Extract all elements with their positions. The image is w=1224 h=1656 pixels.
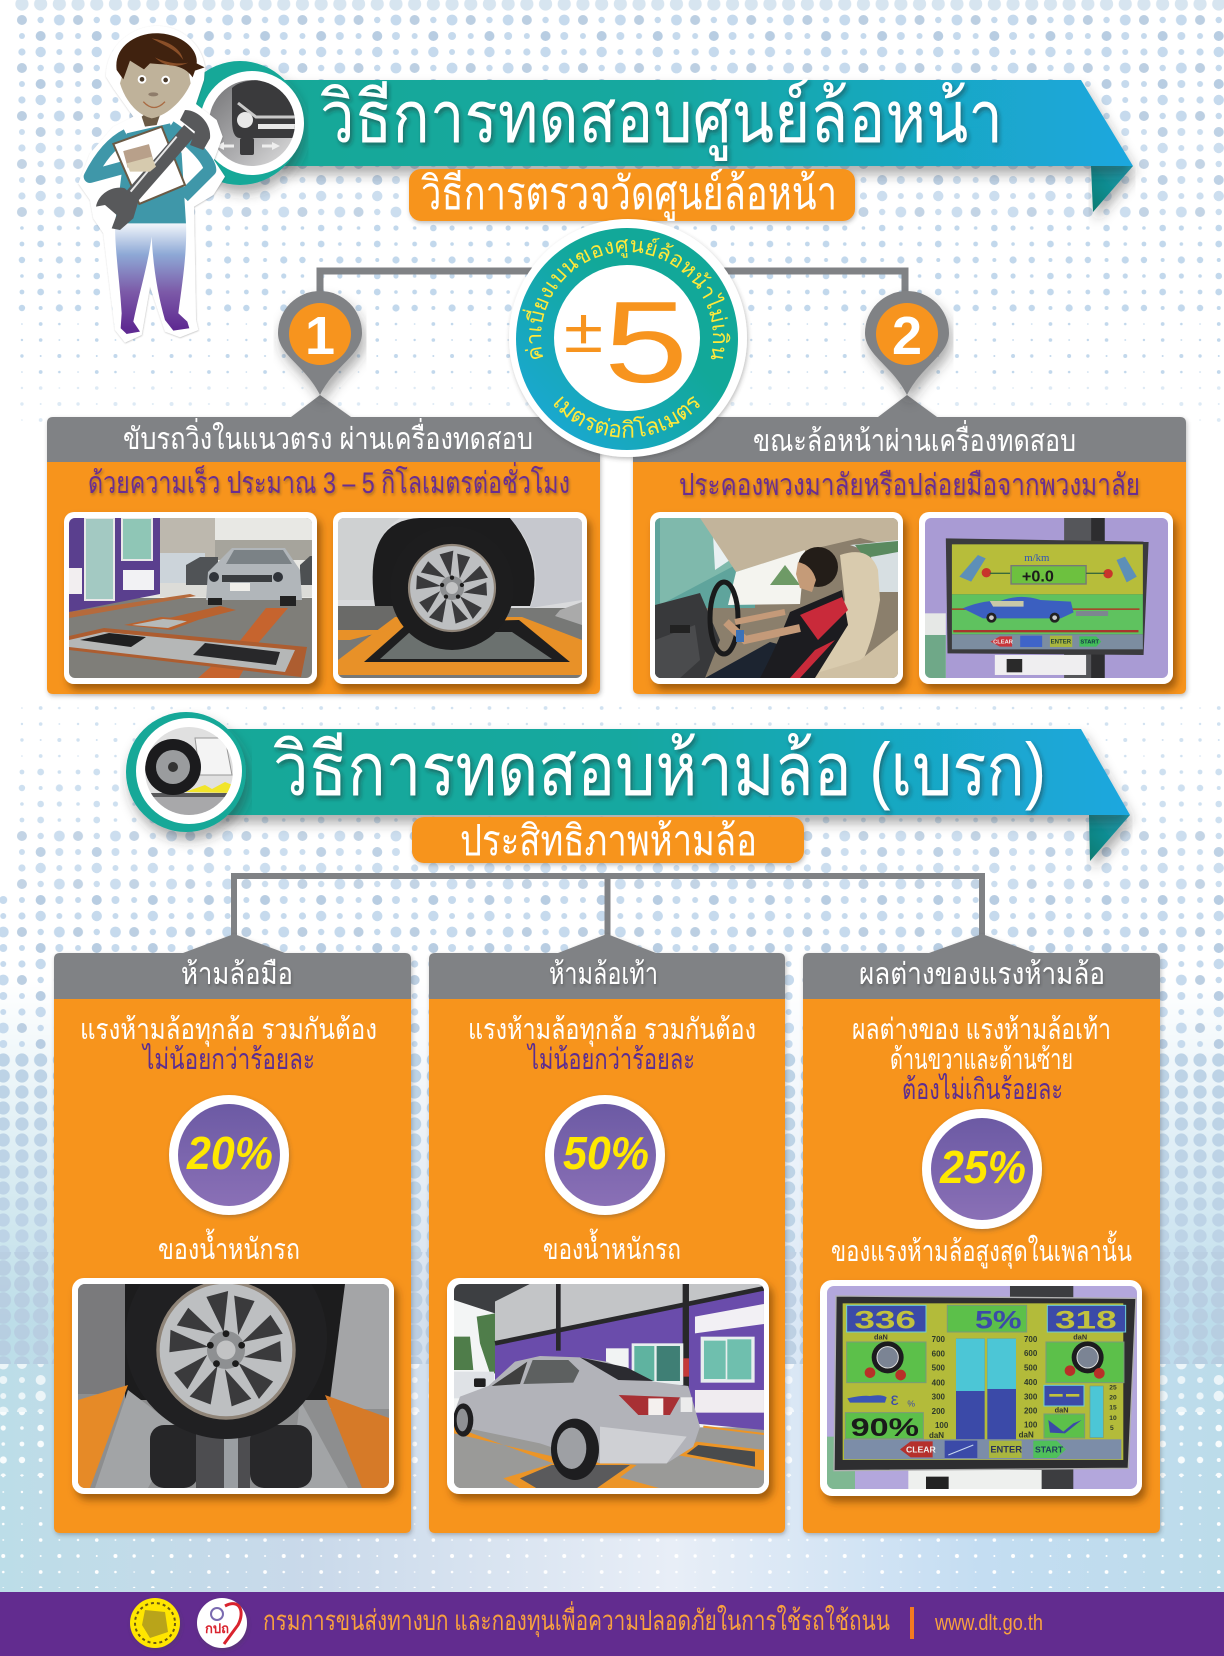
- photo: car rear on brake tester: [447, 1278, 769, 1494]
- photo: wheel on brake rollers: [72, 1237, 394, 1494]
- text: difference requirement: ผลต่างของ แรงห้ามล้อเท้า: [852, 1014, 1111, 1046]
- photo: brake tester monitor: 318: [1055, 1308, 1117, 1335]
- photo: brake tester monitor: 400: [932, 1378, 946, 1387]
- paper detail: [123, 144, 153, 168]
- hair highlights: [152, 38, 188, 66]
- photo: brake tester monitor: daN: [1019, 1430, 1034, 1439]
- photo: brake tester monitor: 15: [1109, 1404, 1117, 1411]
- pin: step 1: 1: [305, 306, 335, 366]
- subheading pill: alignment measurement: วิธีการตรวจวัดศูนย์ล้อหน้า: [421, 167, 837, 221]
- badge: 50%: [545, 1095, 665, 1215]
- logo: road safety fund: [197, 1598, 247, 1648]
- photo: brake tester monitor: daN: [1073, 1332, 1087, 1341]
- text: foot brake requirement: [468, 1014, 756, 1076]
- photo: brake tester monitor: 500: [932, 1364, 946, 1373]
- photo: brake tester monitor: 700: [1024, 1335, 1038, 1344]
- hair: [116, 33, 205, 79]
- panel header: straight-line driving: [47, 395, 600, 462]
- title: วิธีการทดสอบศูนย์ล้อหน้า: [320, 78, 1003, 161]
- panel body: straight-line driving: [47, 462, 600, 694]
- pin: step 2: [865, 291, 949, 395]
- photo: toe test monitor: [919, 512, 1173, 684]
- footer organisation text: กรมการขนส่งทางบก และกองทุนเพื่อความปลอดภัยในการใช้รถใช้ถนน: [263, 1601, 890, 1638]
- character: technician with wrench: [78, 26, 225, 343]
- badge: 25%: 25%: [939, 1141, 1026, 1193]
- photo: brake tester monitor: 10: [1109, 1415, 1117, 1422]
- connector lines: brake section: [234, 876, 982, 936]
- text: hand brake requirement: แรงห้ามล้อทุกล้อ รวมกันต้อง: [80, 1014, 377, 1047]
- photo: toe test monitor: START: [1080, 639, 1100, 645]
- badge: 20%: 20%: [186, 1127, 273, 1179]
- panel: foot brake: [429, 934, 785, 1533]
- ribbon body: [215, 729, 1130, 815]
- photo: brake tester monitor: 200: [1024, 1406, 1038, 1415]
- panel header: brake force difference: [803, 953, 1160, 999]
- photo: brake tester monitor: 25: [1109, 1384, 1117, 1391]
- text: difference requirement: ต้องไม่เกินร้อยละ: [902, 1072, 1063, 1106]
- photo: car approaching test plates: [64, 512, 317, 684]
- mouth: [143, 102, 165, 107]
- neck: [142, 110, 160, 127]
- photo: brake tester monitor: 300: [1024, 1392, 1038, 1401]
- photo: brake tester monitor: 336: [854, 1308, 916, 1335]
- footer bar: [0, 1592, 1224, 1656]
- photo: brake tester monitor: 100: [1024, 1420, 1038, 1429]
- banner: brake test: [215, 728, 1130, 861]
- connector lines: front wheel section: [320, 271, 905, 292]
- nose: [148, 92, 158, 96]
- photo: front wheel on test plate: [333, 512, 587, 684]
- photo: driver holding steering wheel: [650, 512, 903, 684]
- tolerance badge: ±5 metres per kilometre: เมตรต่อกิโลเมตร: [554, 396, 700, 438]
- caption: of max axle brake force: ของแรงห้ามล้อสูงสุดในเพลานั้น: [831, 1230, 1132, 1269]
- panel header: straight-line driving: ขับรถวิ่งในแนวตรง ผ่านเครื่องทดสอบ: [123, 418, 533, 456]
- photo: brake tester monitor: ε: [891, 1389, 899, 1409]
- photo: brake tester monitor: CLEAR: [906, 1445, 937, 1455]
- photo: brake tester monitor: 700: [932, 1335, 946, 1344]
- sticker outline: [78, 26, 225, 343]
- panel header: hand brake: [54, 953, 411, 999]
- panel header: brake force difference: ผลต่างของแรงห้ามล้อ: [859, 958, 1105, 991]
- wrench: [96, 110, 210, 230]
- photo: brake tester monitor: daN: [874, 1332, 888, 1341]
- photo: brake tester monitor: 20: [1109, 1394, 1117, 1401]
- text: difference requirement: [852, 1014, 1111, 1106]
- photo: brake tester monitor: ENTER: [990, 1445, 1022, 1455]
- tolerance badge: ±5 metres per kilometre: ค่าเบี่ยงเบนของศูนย์ล้อหน้าไม่เกิน: [522, 238, 730, 360]
- panel body: foot brake: [429, 999, 785, 1533]
- panel: brake force difference: [803, 934, 1160, 1533]
- text: foot brake requirement: ไม่น้อยกว่าร้อยละ: [526, 1042, 695, 1076]
- panel body: brake force difference: [803, 999, 1160, 1533]
- tolerance badge: ±5 metres per kilometre: [508, 218, 750, 462]
- jacket: [115, 123, 186, 223]
- ribbon fold: [1091, 166, 1133, 212]
- panel body: hand brake: [54, 999, 411, 1533]
- panel header: while front wheel passes: [633, 395, 1186, 462]
- panel header: hand brake: ห้ามล้อมือ: [181, 958, 293, 991]
- badge: 50%: 50%: [563, 1127, 649, 1179]
- photo: toe test monitor: +0.0: [1022, 567, 1054, 585]
- photo: toe test monitor: CLEAR: [993, 639, 1013, 645]
- eyes: [138, 75, 170, 84]
- clipboard: [113, 127, 185, 204]
- icon: wheel on plate badge: [126, 712, 246, 832]
- legs: [115, 223, 189, 334]
- hand: [127, 157, 156, 172]
- badge: 20%: [169, 1095, 289, 1215]
- text: difference requirement: ด้านขวาและด้านซ้าย: [890, 1044, 1073, 1076]
- text: foot brake requirement: แรงห้ามล้อทุกล้อ รวมกันต้อง: [468, 1014, 756, 1047]
- arms: [90, 127, 210, 197]
- photo: brake tester monitor: 5%: [975, 1308, 1022, 1335]
- icon: car front wheel badge: [178, 61, 304, 185]
- photo: toe test monitor: m/km: [1024, 552, 1050, 564]
- photo: toe test monitor: ENTER: [1051, 640, 1072, 646]
- photo: brake tester monitor: [820, 1280, 1142, 1496]
- subtitle: speed: ด้วยความเร็ว ประมาณ 3 – 5 กิโลเมตรต่อชั่วโมง: [88, 462, 570, 500]
- tolerance badge: ±5 metres per kilometre: ±: [564, 297, 603, 366]
- photo: brake tester monitor: 500: [1024, 1364, 1038, 1373]
- panel: straight-line driving: [47, 395, 600, 694]
- panel body: while front wheel passes: [633, 462, 1186, 694]
- photo: brake tester monitor: 200: [932, 1407, 946, 1416]
- photo: brake tester monitor: 400: [1024, 1378, 1038, 1387]
- panel header: while front wheel passes: ขณะล้อหน้าผ่านเครื่องทดสอบ: [753, 420, 1076, 458]
- ribbon fold: [1089, 815, 1130, 861]
- panel header: foot brake: ห้ามล้อเท้า: [549, 958, 658, 991]
- photo: brake tester monitor: 90%: [851, 1414, 919, 1442]
- banner: front wheel alignment test: [280, 78, 1133, 212]
- photo: brake tester monitor: daN: [929, 1431, 944, 1440]
- pin: step 2: 2: [892, 306, 922, 366]
- photo: brake tester monitor: daN: [1055, 1406, 1069, 1415]
- tolerance badge: ±5 metres per kilometre: 5: [604, 277, 688, 407]
- badge: 25%: [922, 1109, 1042, 1229]
- title: วิธีการทดสอบห้ามล้อ (เบรก): [273, 728, 1046, 811]
- ribbon body: [280, 80, 1133, 166]
- subheading pill: brake efficiency: ประสิทธิภาพห้ามล้อ: [460, 817, 757, 864]
- text: hand brake requirement: ไม่น้อยกว่าร้อยละ: [141, 1042, 315, 1076]
- photo: brake tester monitor: 600: [932, 1350, 946, 1359]
- caption: of vehicle weight (foot): ของน้ำหนักรถ: [543, 1228, 681, 1266]
- panel header: foot brake: [429, 953, 785, 999]
- footer website: www.dlt.go.th: [934, 1610, 1043, 1635]
- pin: step 1: [278, 291, 362, 395]
- caption: of vehicle weight (hand): ของน้ำหนักรถ: [158, 1228, 300, 1266]
- photo: brake tester monitor: 100: [935, 1421, 949, 1430]
- logo: road safety fund: กปถ: [205, 1621, 229, 1636]
- logo: transport department seal: [130, 1598, 180, 1648]
- panel: hand brake: [54, 934, 411, 1533]
- photo: brake tester monitor: 5: [1110, 1425, 1114, 1432]
- photo: brake tester monitor: %: [907, 1399, 915, 1409]
- photo: brake tester monitor: 300: [932, 1392, 946, 1401]
- face: [120, 60, 191, 118]
- panel: while front wheel passes: [633, 395, 1186, 694]
- photo: brake tester monitor: START: [1035, 1444, 1064, 1454]
- photo: brake tester monitor: 600: [1024, 1349, 1038, 1358]
- text: hand brake requirement: [80, 1014, 377, 1076]
